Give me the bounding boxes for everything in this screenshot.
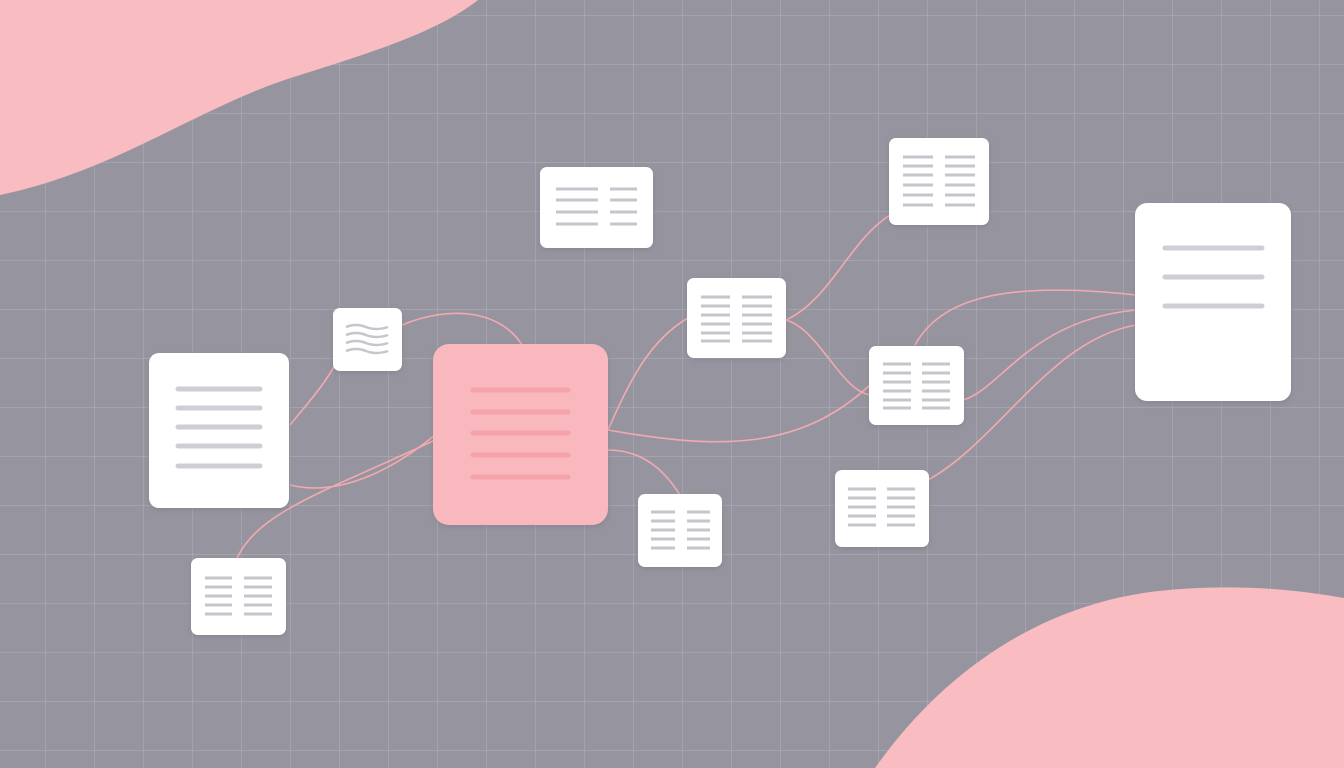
card: right large document [1135, 203, 1291, 401]
connectors [237, 215, 1136, 558]
card: right-middle table [869, 346, 964, 425]
card: bottom-left table [191, 558, 286, 635]
blob: bottom-right pink [875, 587, 1344, 768]
card: middle table [687, 278, 786, 358]
card: central pink hub [433, 344, 608, 525]
blob: top-left pink [0, 0, 478, 195]
card: top-right table [889, 138, 989, 225]
card: top table [540, 167, 653, 248]
card: wavy icon [333, 308, 402, 371]
card: lower right table [835, 470, 929, 547]
card: lower middle table [638, 494, 722, 567]
card: left large document [149, 353, 289, 508]
